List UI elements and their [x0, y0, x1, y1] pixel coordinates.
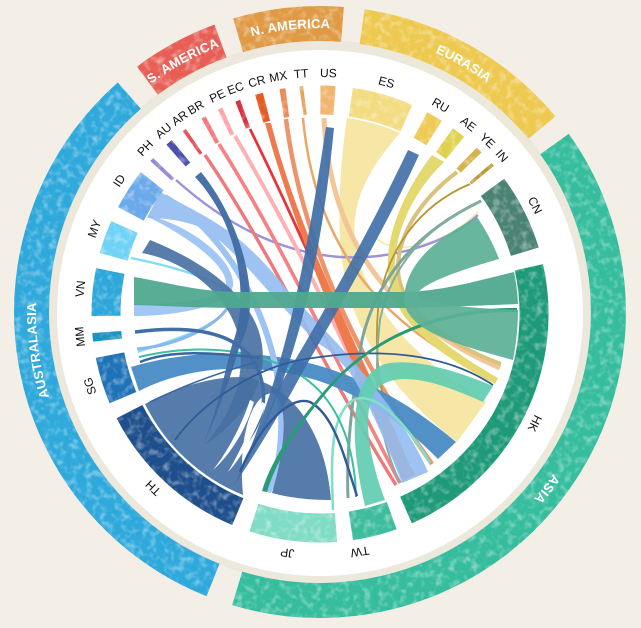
fan sliver: TH: [213, 400, 254, 470]
segment: AU: [176, 151, 181, 156]
segment: PH: [161, 168, 164, 171]
label: N. America: N. AMERICA: [250, 19, 330, 36]
chord: EC to HK: [250, 129, 411, 477]
chord: ID to SG light blue: [137, 302, 231, 349]
chord: SG to TW teal line: [139, 350, 356, 497]
chord: ID to HK light blue: [147, 192, 428, 483]
continent arc: Asia: [237, 144, 608, 601]
chord: ID to JP light blue: [165, 197, 281, 492]
chord: US to TH blue: [238, 127, 334, 478]
label: AE: AE: [458, 114, 479, 135]
segment: JP: [254, 518, 336, 528]
label: TW: TW: [349, 543, 370, 560]
segment: AR: [191, 141, 194, 143]
fan sliver: TH right: [228, 402, 266, 472]
label: ES: ES: [377, 73, 396, 91]
label: Australasia: AUSTRALASIA: [27, 303, 49, 397]
label: IN: IN: [493, 147, 511, 165]
chord: BR to HK: [219, 144, 400, 483]
chord: SG to HK blue: [131, 353, 456, 459]
label: TH: TH: [143, 477, 164, 499]
label: MY: MY: [85, 218, 104, 240]
chord: MY to TH blue: [142, 240, 263, 445]
label: BR: BR: [185, 97, 207, 118]
label: AU: AU: [153, 120, 174, 141]
chord: TH to JP big blue: [145, 377, 331, 500]
chord: YE to HK gold: [377, 184, 470, 475]
chord: AE to HK: [398, 172, 501, 364]
chord: TH strand: [150, 362, 257, 402]
chord: ES to TH blue: [232, 150, 419, 488]
segment: VN: [106, 271, 110, 316]
continent arc: Eurasia: [362, 27, 542, 128]
segment: TH: [130, 412, 238, 512]
chord: MM to TH blue: [135, 329, 264, 440]
beige band behind circle: [48, 40, 592, 584]
segment: AE: [444, 140, 455, 148]
label: Asia: ASIA: [534, 474, 558, 502]
label: ID: ID: [110, 171, 129, 190]
label: SG: SG: [81, 376, 99, 396]
segment: US: [320, 86, 334, 115]
label: AR: AR: [169, 107, 191, 129]
label: MM: MM: [72, 326, 88, 347]
label: PH: PH: [134, 137, 156, 159]
chord: MY to SG cyan: [131, 258, 231, 352]
label: US: US: [320, 66, 337, 80]
chord: AR to HK: [205, 155, 396, 485]
chord: JP to HK light teal line: [332, 398, 430, 510]
continent arc: Australasia: [32, 96, 213, 580]
segment: PE: [224, 121, 228, 123]
segment: CN: [492, 187, 525, 252]
chord: TH to TW arch: [240, 401, 357, 496]
continent arc: N. America: [238, 24, 342, 35]
chord: PE to HK: [235, 136, 405, 481]
segment: MY: [114, 227, 124, 257]
chord: VN to HK green: [134, 272, 518, 308]
chord: CN to HK green: [404, 217, 518, 360]
chord: TH to HK dark line: [175, 353, 493, 440]
continent arc: S. America: [148, 41, 220, 81]
segment: RU: [420, 125, 434, 133]
label: CR: CR: [247, 72, 267, 90]
segment: ES: [351, 102, 406, 118]
chord: AU to TH blue: [195, 172, 250, 445]
label: TT: TT: [293, 66, 310, 81]
label: EC: EC: [225, 79, 246, 98]
chord: TT to HK: [303, 118, 497, 379]
segment: HK: [406, 267, 534, 510]
segment: MX: [282, 88, 287, 118]
segment: MM: [92, 332, 122, 340]
chord: TH to SG dark: [140, 353, 260, 362]
chord: US to HK: [324, 118, 500, 368]
label: S. America: S. AMERICA: [147, 39, 220, 82]
segment: SG: [110, 355, 123, 398]
label: Eurasia: EURASIA: [436, 44, 490, 82]
chord: HK to JP dark green: [262, 308, 517, 492]
label: JP: JP: [279, 545, 295, 561]
chord: CR to HK: [265, 123, 414, 481]
label: PE: PE: [207, 86, 228, 106]
label: MX: MX: [268, 68, 288, 85]
chord: MX to HK: [286, 119, 432, 464]
segment: BR: [208, 129, 212, 131]
chords: [131, 118, 518, 510]
white inner disc: [57, 50, 583, 576]
country segments: [106, 100, 534, 528]
segment: EC: [241, 114, 245, 115]
chord: PH to CN purple: [176, 180, 478, 257]
chord: ID to VN light blue: [134, 215, 233, 316]
chord: ES to CN thin yellow: [372, 212, 478, 247]
segment: CR: [259, 107, 266, 109]
segment: ID: [131, 181, 152, 214]
country labels: [72, 66, 545, 561]
segment: YE: [467, 158, 471, 162]
chord: RU to HK: [388, 155, 498, 384]
segment: IN: [480, 172, 483, 175]
label: VN: VN: [72, 280, 88, 298]
label: YE: YE: [477, 130, 498, 151]
label: HK: HK: [525, 413, 545, 434]
label: CN: CN: [525, 194, 545, 216]
chord: ES to HK yellow: [339, 118, 486, 442]
segment: TW: [351, 516, 392, 526]
chord: TW to HK light teal: [355, 362, 493, 506]
label: RU: RU: [429, 95, 452, 116]
segment: TT: [301, 86, 305, 115]
chord: CN to TW gray: [348, 201, 481, 498]
chord: CN to JP gray: [377, 201, 481, 483]
